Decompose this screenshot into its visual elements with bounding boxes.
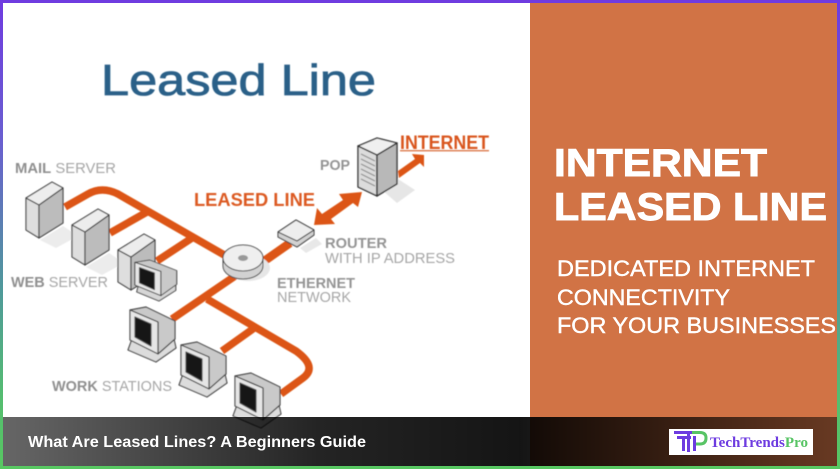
headline (554, 142, 827, 229)
label: mail server: MAIL SERVER (15, 160, 116, 177)
arrow: POP to internet (398, 154, 424, 178)
subheading: CONNECTIVITY (557, 285, 730, 310)
label: router with ip address: WITH IP ADDRESS (325, 250, 455, 267)
headline: INTERNET (554, 142, 767, 185)
subheading: DEDICATED INTERNET (557, 256, 815, 281)
label: router with ip address: ROUTER (325, 235, 387, 252)
subheading (557, 256, 836, 338)
icon: web server (72, 209, 124, 275)
label: ethernet network: ETHERNET (277, 276, 355, 292)
icon: server with monitor (118, 234, 177, 301)
label: ethernet network (277, 276, 355, 306)
leased line network diagram (11, 133, 489, 428)
logo wordmark: TechTrendsPro (710, 435, 808, 451)
label: pop: POP (320, 157, 350, 174)
label: ethernet network: NETWORK (277, 290, 351, 306)
label: router with ip address (325, 235, 455, 267)
icon: workstation 3 (233, 373, 281, 428)
icon: ethernet hub (223, 245, 270, 281)
subheading: FOR YOUR BUSINESSES (557, 313, 836, 338)
logo mark (674, 431, 706, 452)
orange network cables (65, 190, 309, 394)
logo: TechTrendsPro (669, 429, 813, 455)
panel: orange headline background (530, 3, 837, 466)
double arrow: leased line link (314, 192, 362, 225)
diagram title: Leased Line (101, 56, 376, 105)
bottom caption bar (3, 417, 837, 466)
icon: router (278, 220, 322, 253)
icon: workstation 2 (179, 342, 227, 397)
panel: diagram background (3, 3, 530, 466)
label: leased line: LEASED LINE (194, 190, 315, 210)
headline: LEASED LINE (554, 186, 827, 229)
icon: workstation 1 (128, 307, 176, 362)
caption text: What Are Leased Lines? A Beginners Guide (28, 434, 366, 451)
label: work stations: WORK STATIONS (52, 378, 172, 395)
icon: POP server (358, 138, 415, 203)
label: web server: WEB SERVER (11, 274, 108, 291)
icon: mail server (26, 182, 78, 248)
label: internet: INTERNET (400, 133, 489, 154)
